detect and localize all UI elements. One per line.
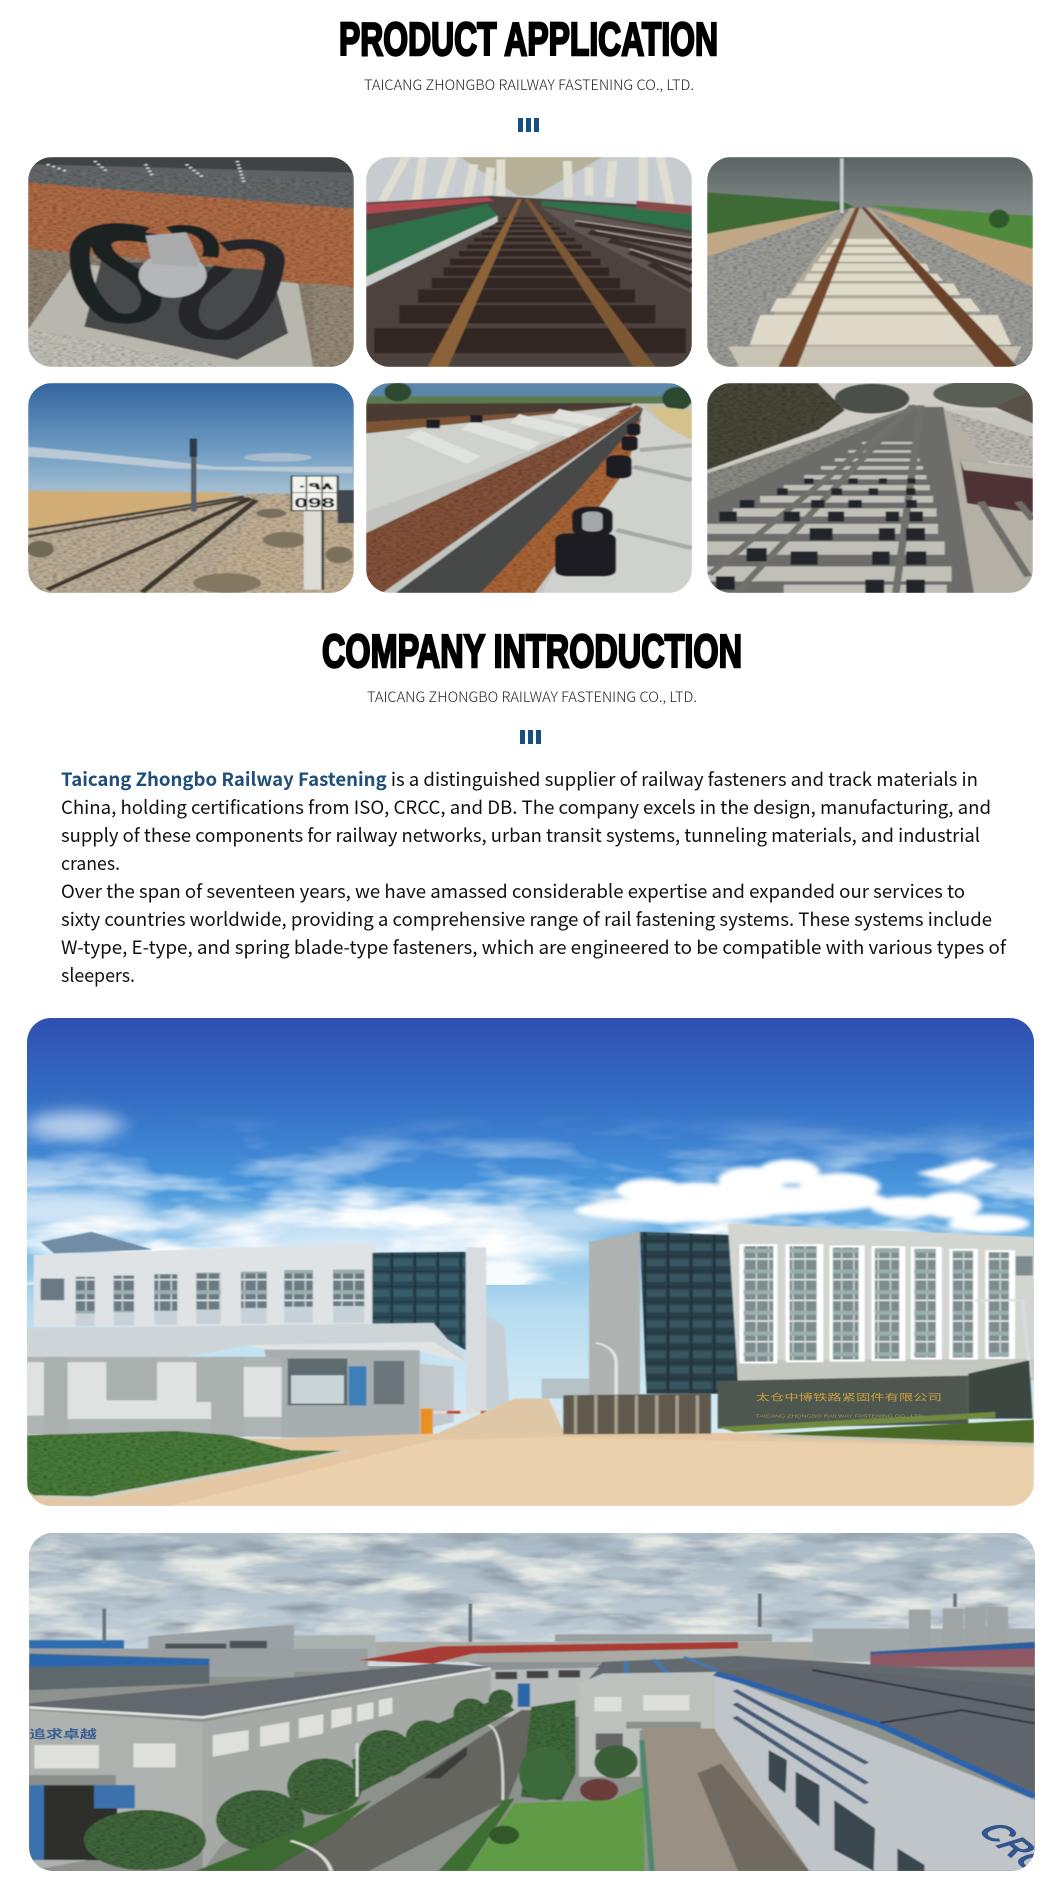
text block: company description: W-type, E-type, and spring blade-type fasteners, which are engineered to be compatible with various types of	[61, 934, 1007, 960]
text block: company description	[61, 766, 1007, 988]
building: left office	[41, 1232, 152, 1253]
title: product application: PRODUCT APPLICATION	[339, 13, 718, 65]
sign: kilometre board	[304, 510, 323, 590]
wall lettering: 追求卓越	[29, 1726, 97, 1742]
text block: company description: Over the span of seventeen years, we have amassed considerable expertise and expanded our services to	[61, 878, 965, 904]
walkway	[642, 1728, 809, 1871]
clouds: shadow layer	[29, 1533, 1035, 1646]
tree rows	[84, 1690, 514, 1870]
sign wall	[718, 1376, 968, 1429]
icon: three bars divider	[518, 118, 540, 132]
text block: company description: supply of these components for railway networks, urban transit systems, tunneling materials, and industrial	[61, 822, 980, 848]
photo: rusty rail with clip along concrete sleepers	[366, 383, 692, 593]
bush: left green	[27, 1431, 349, 1496]
rails	[428, 199, 522, 367]
building: gatehouse canopy and wall	[27, 1323, 469, 1364]
text block: company description: China, holding certifications from ISO, CRCC, and DB. The company excels in the design, manufacturing, and	[61, 794, 991, 820]
clouds: soft left wisp and lower haze	[0, 1111, 650, 1267]
rails and fasteners	[709, 405, 921, 593]
photo: bridge track with sleepers	[366, 157, 692, 367]
building: glass stairwell	[372, 1252, 466, 1350]
road	[267, 1710, 545, 1871]
photo: aerial view of factory campus	[29, 1533, 1035, 1871]
building: right factory with solar roof	[715, 1674, 1035, 1871]
photo: turnout track with steel sleepers	[707, 383, 1033, 593]
clouds: wispy noise layer	[27, 1018, 1034, 1285]
main rail	[366, 405, 643, 593]
title: company introduction: COMPANY INTRODUCTION	[322, 625, 742, 677]
photo: desert railway with kilometre sign: 098	[294, 495, 335, 510]
signal pole	[191, 438, 196, 512]
photo: desert railway with kilometre sign: ٠٩٨	[296, 481, 334, 492]
building: right factory	[589, 1232, 640, 1395]
photo: factory entrance under blue sky: TAICANG ZHONGBO RAILWAY FASTENING CO., LTD.	[756, 1413, 925, 1419]
text block: company description: Taicang Zhongbo Railway Fastening is a distinguished supplier of railway fasteners and track materials in	[61, 766, 978, 792]
icon: three bars divider	[520, 730, 542, 744]
sleepers	[707, 442, 952, 593]
freight wagon	[960, 460, 1033, 513]
text block: company description: sleepers.	[61, 962, 135, 988]
photo: factory entrance under blue sky	[27, 1018, 1035, 1871]
lawn	[467, 1787, 645, 1871]
rails	[778, 207, 860, 367]
clouds: cumulus noise layer	[29, 1533, 1035, 1646]
subtitle: company name: TAICANG ZHONGBO RAILWAY FASTENING CO., LTD.	[367, 687, 697, 707]
photo: rail clip close-up	[28, 157, 354, 367]
clouds: crisp cumulus	[576, 1158, 1029, 1233]
sign text: 太仓中博铁路紧固件有限公司	[756, 1390, 942, 1403]
fastening clips	[426, 415, 640, 576]
gate	[563, 1394, 711, 1434]
text block: company description: sixty countries worldwide, providing a comprehensive range of rail fastening systems. These systems include	[61, 906, 992, 932]
photo: desert railway with kilometre sign	[28, 383, 354, 593]
sleepers	[374, 217, 686, 353]
building: left warehouse	[29, 1664, 491, 1717]
lawn right	[762, 1420, 1034, 1443]
photo: concrete sleeper track in countryside	[707, 157, 1033, 367]
text block: company description: cranes.	[61, 850, 120, 876]
concrete sleepers	[728, 346, 1021, 367]
building: center block	[579, 1672, 718, 1777]
clip: left black ring	[80, 228, 162, 319]
background buildings	[29, 1640, 124, 1649]
distant solar roofs	[467, 1662, 603, 1682]
clip: right black ring	[189, 244, 275, 335]
subtitle: company name: TAICANG ZHONGBO RAILWAY FASTENING CO., LTD.	[364, 75, 694, 95]
bolt and washer	[139, 253, 207, 298]
